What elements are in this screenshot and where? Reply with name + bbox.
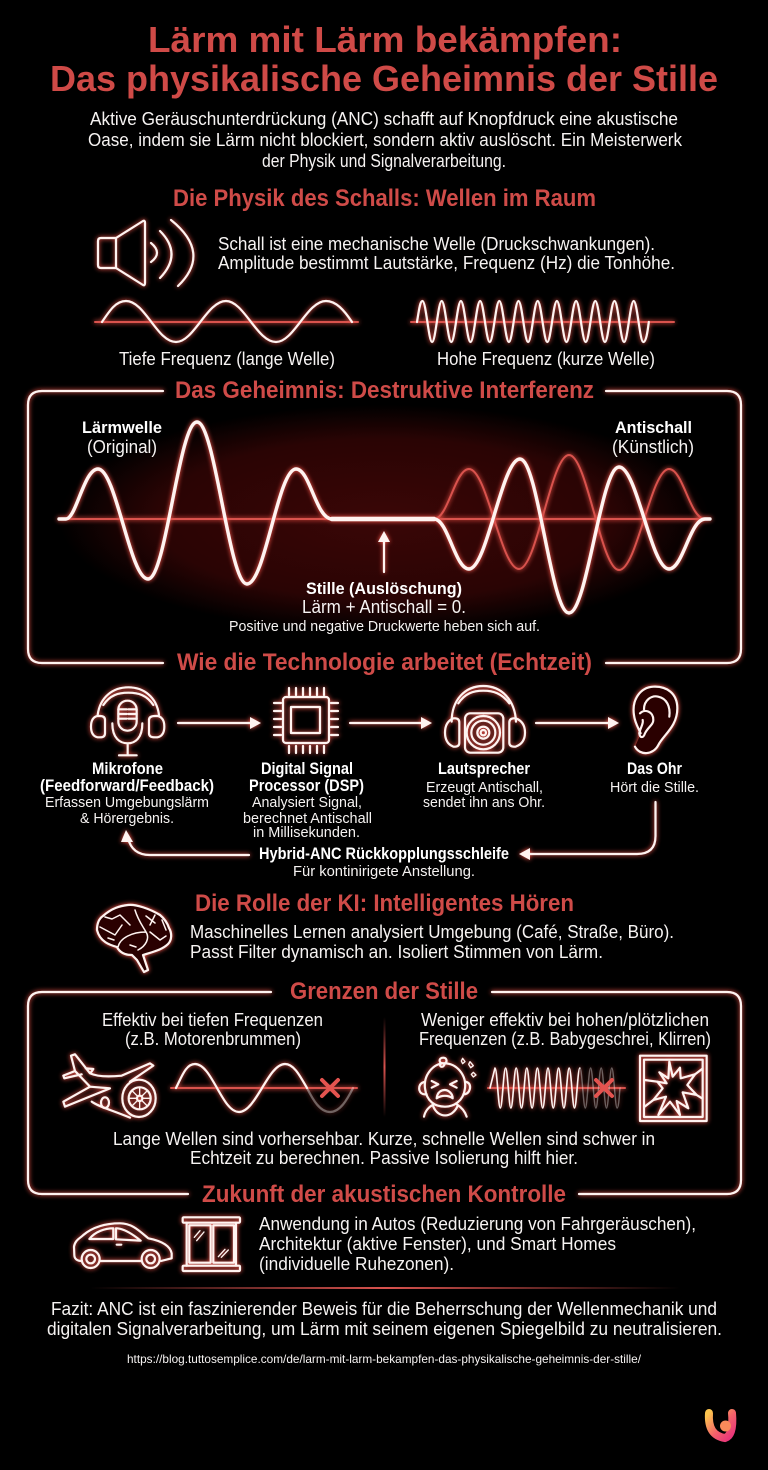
step: ear: Hört die Stille. — [610, 779, 699, 796]
chart: high frequency wave — [411, 301, 674, 342]
high frequency effectiveness text: Frequenzen (z.B. Babygeschrei, Klirren) — [419, 1029, 711, 1049]
step: ear — [610, 759, 699, 796]
silence explanation: Stille (Auslöschung) — [306, 579, 462, 598]
step: microphones: & Hörergebnis. — [80, 810, 174, 827]
step: loudspeaker: sendet ihn ans Ohr. — [423, 794, 545, 811]
arrow: silence — [378, 531, 390, 572]
arrow: speaker to ear — [536, 717, 619, 729]
step: loudspeaker: Lautsprecher — [438, 759, 530, 778]
feedback loop label — [259, 844, 509, 880]
icon: red cross high — [596, 1080, 612, 1096]
step: DSP — [243, 759, 372, 841]
high frequency effectiveness text — [419, 1010, 711, 1049]
label: anti-noise — [612, 418, 694, 457]
step: DSP: in Millisekunden. — [253, 824, 360, 841]
future description — [259, 1214, 696, 1274]
future description: Architektur (aktive Fenster), und Smart Homes — [259, 1234, 616, 1254]
step: DSP: Analysiert Signal, — [252, 794, 362, 811]
silence explanation: Lärm + Antischall = 0. — [302, 597, 466, 617]
step: microphones: Erfassen Umgebungslärm — [45, 794, 209, 811]
source url: https://blog.tuttosemplice.com/de/larm-mit-larm-bekampfen-das-physikalische-geheimnis-der-stille/ — [127, 1352, 642, 1366]
AI description: Passt Filter dynamisch an. Isoliert Stimmen von Lärm. — [190, 942, 603, 962]
panel: destructive interference — [28, 377, 741, 663]
heading: interference: Das Geheimnis: Destruktive Interferenz — [175, 377, 594, 404]
AI description — [190, 922, 674, 962]
heading: physics of sound: Die Physik des Schalls: Wellen im Raum — [173, 185, 596, 212]
heading: future: Zukunft der akustischen Kontrolle — [202, 1181, 566, 1208]
step: DSP: berechnet Antischall — [243, 810, 372, 827]
step: DSP: Processor (DSP) — [249, 776, 364, 795]
conclusion — [47, 1299, 722, 1339]
title: Lärm mit Lärm bekämpfen: — [148, 19, 622, 60]
future description: (individuelle Ruhezonen). — [259, 1254, 454, 1274]
step: DSP: Digital Signal — [261, 759, 353, 778]
limits explanation: Echtzeit zu berechnen. Passive Isolierung hilft hier. — [190, 1148, 578, 1168]
icon: broken window — [640, 1056, 707, 1121]
icon: car — [74, 1223, 172, 1268]
icon: speaker — [98, 220, 193, 286]
arrow: feedback from ear — [519, 802, 656, 860]
icon: headphones with microphone — [91, 687, 164, 755]
future description: Anwendung in Autos (Reduzierung von Fahrgeräuschen), — [259, 1214, 696, 1234]
logo — [709, 1413, 732, 1438]
label: low frequency: Tiefe Frequenz (lange Welle) — [119, 349, 335, 369]
intro text: der Physik und Signalverarbeitung. — [262, 151, 506, 171]
step: ear: Das Ohr — [627, 759, 682, 778]
icon: ear — [634, 687, 677, 753]
icon: airplane turbine — [63, 1054, 156, 1118]
title: Das physikalische Geheimnis der Stille — [50, 58, 718, 99]
physics description — [218, 234, 675, 273]
limits explanation: Lange Wellen sind vorhersehbar. Kurze, schnelle Wellen sind schwer in — [113, 1129, 655, 1149]
limits explanation — [113, 1129, 655, 1168]
chart: low frequency wave — [95, 301, 358, 342]
wave background glow — [59, 405, 710, 633]
chart: low frequency cancelled wave — [171, 1064, 357, 1112]
icon: brain — [97, 905, 171, 972]
low frequency effectiveness text — [102, 1010, 323, 1049]
intro text — [88, 109, 683, 171]
chart: noise and anti-noise waves — [59, 422, 710, 613]
label: noise wave — [82, 418, 162, 457]
heading: limits: Grenzen der Stille — [290, 978, 478, 1005]
step: loudspeaker: Erzeugt Antischall, — [426, 779, 543, 796]
conclusion: digitalen Signalverarbeitung, um Lärm mit seinem eigenen Spiegelbild zu neutralisieren. — [47, 1319, 722, 1339]
arrow: mic to DSP — [178, 717, 261, 729]
feedback loop label: Hybrid-ANC Rückkopplungsschleife — [259, 844, 509, 863]
feedback loop label: Für kontinirigete Anstellung. — [293, 863, 475, 880]
physics description: Schall ist eine mechanische Welle (Druckschwankungen). — [218, 234, 655, 254]
heading: AI: Die Rolle der KI: Intelligentes Hören — [195, 890, 574, 917]
arrow: feedback to microphones — [121, 830, 249, 855]
silence explanation: Positive und negative Druckwerte heben sich auf. — [229, 618, 540, 635]
label: noise wave: (Original) — [87, 437, 157, 457]
label: noise wave: Lärmwelle — [82, 418, 162, 437]
step: microphones: (Feedforward/Feedback) — [40, 776, 214, 795]
icon: red cross low — [322, 1080, 338, 1096]
panel: limits of silence — [28, 978, 741, 1194]
label: anti-noise: (Künstlich) — [612, 437, 694, 457]
low frequency effectiveness text: (z.B. Motorenbrummen) — [125, 1029, 301, 1049]
intro text: Oase, indem sie Lärm nicht blockiert, sondern aktiv auslöscht. Ein Meisterwerk — [88, 130, 683, 150]
AI description: Maschinelles Lernen analysiert Umgebung (Café, Straße, Büro). — [190, 922, 674, 942]
label: anti-noise: Antischall — [615, 418, 692, 437]
icon: crying baby — [419, 1058, 476, 1117]
intro text: Aktive Geräuschunterdrückung (ANC) schafft auf Knopfdruck eine akustische — [90, 109, 678, 129]
low frequency effectiveness text: Effektiv bei tiefen Frequenzen — [102, 1010, 323, 1030]
silence explanation — [229, 579, 540, 635]
panel frame — [28, 391, 741, 663]
step: microphones: Mikrofone — [92, 759, 163, 778]
physics description: Amplitude bestimmt Lautstärke, Frequenz (Hz) die Tonhöhe. — [218, 253, 675, 273]
conclusion: Fazit: ANC ist ein faszinierender Beweis für die Beherrschung der Wellenmechanik und — [51, 1299, 717, 1319]
high frequency effectiveness text: Weniger effektiv bei hohen/plötzlichen — [421, 1010, 709, 1030]
title — [50, 19, 718, 99]
step: microphones — [40, 759, 214, 827]
step: loudspeaker — [423, 759, 545, 811]
arrow: DSP to speaker — [350, 717, 432, 729]
icon: headphones with speaker — [445, 686, 525, 753]
label: high frequency: Hohe Frequenz (kurze Welle) — [437, 349, 655, 369]
heading: technology: Wie die Technologie arbeitet (Echtzeit) — [177, 649, 592, 676]
icon: DSP chip — [274, 688, 338, 753]
icon: window — [183, 1217, 240, 1271]
panel frame — [28, 992, 741, 1194]
chart: high frequency cancelled wave — [488, 1068, 625, 1108]
